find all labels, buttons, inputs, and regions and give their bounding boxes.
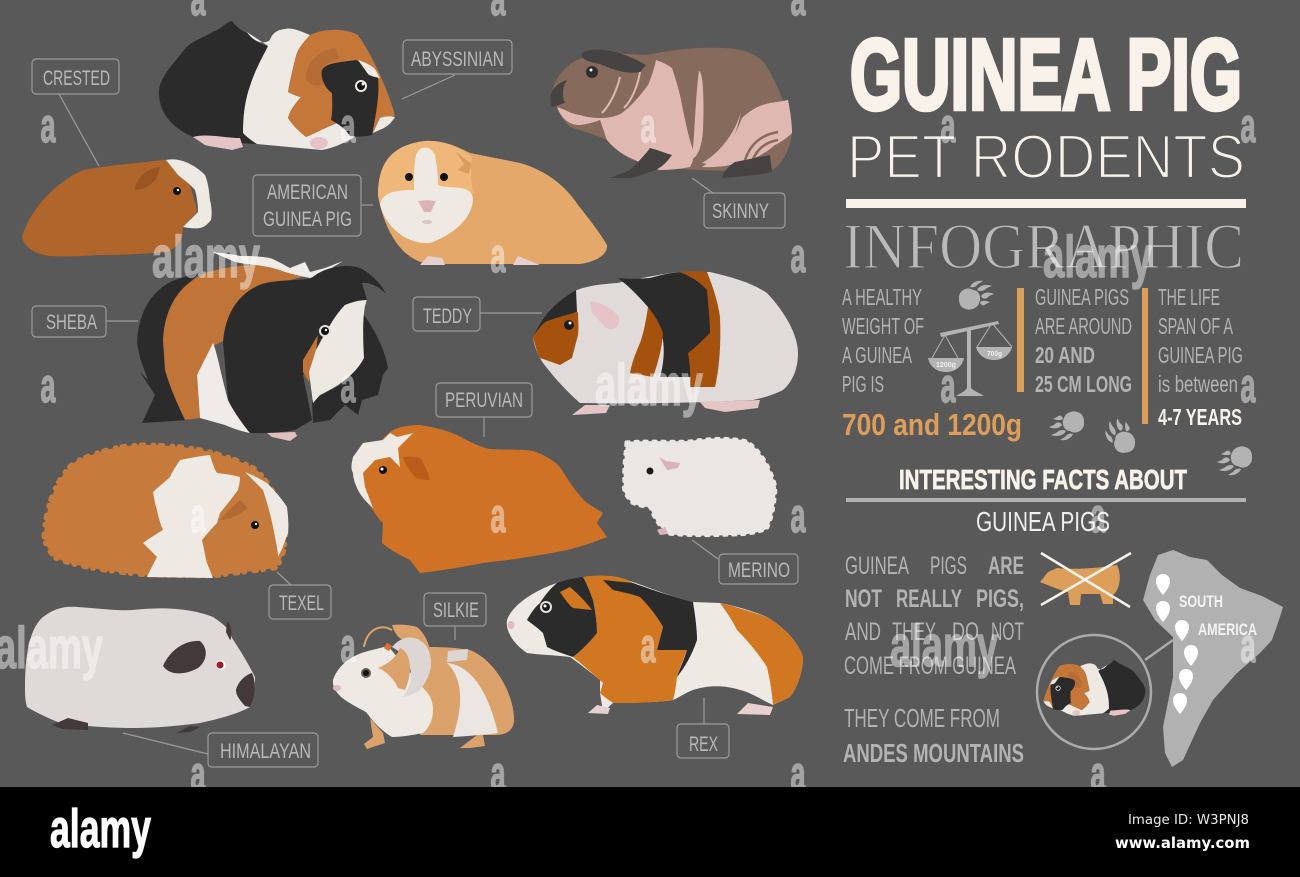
watermarks: alamy	[890, 614, 998, 679]
watermarks: a	[490, 230, 506, 283]
text: not really pigs: DO	[952, 618, 979, 646]
text: healthy weight: A HEALTHY	[842, 284, 922, 310]
watermarks: a	[940, 100, 956, 153]
text: andes mountains: THEY COME FROM	[844, 703, 1000, 733]
text: life span: SPAN OF A	[1158, 313, 1233, 339]
text: not really pigs: PIGS	[930, 552, 967, 580]
title bar	[846, 199, 1246, 208]
pig: abyssinian	[159, 21, 395, 150]
weight value: 700 and 1200g	[842, 407, 1022, 442]
pig: peruvian	[351, 425, 607, 573]
text: healthy weight: WEIGHT OF	[842, 313, 924, 339]
pig: texel	[44, 445, 288, 578]
icon: paw print	[959, 281, 994, 310]
watermarks: a	[1090, 490, 1106, 543]
map: south america	[1143, 550, 1283, 767]
text: not really pigs: COME FROM GUINEA	[844, 652, 1016, 680]
divider: orange 2	[1142, 288, 1148, 424]
watermarks: a	[1240, 620, 1256, 673]
icon: paw print 2	[1049, 411, 1084, 440]
watermarks: alamy	[1043, 225, 1152, 290]
footer bar: alamy	[50, 799, 151, 859]
label: american guinea pig: AMERICAN	[267, 181, 348, 204]
footer bar	[0, 787, 1300, 877]
text: not really pigs: THEY	[892, 618, 936, 646]
text: life span: GUINEA PIG	[1158, 342, 1243, 368]
text: healthy weight: PIG IS	[842, 371, 884, 397]
pig: crested	[22, 159, 212, 256]
label: rex	[677, 698, 729, 758]
label: abyssinian	[402, 40, 512, 99]
label: texel	[269, 572, 331, 619]
watermarks: a	[1240, 360, 1256, 413]
label: merino: MERINO	[728, 559, 790, 582]
text: andes mountains: ANDES MOUNTAINS	[843, 738, 1024, 768]
pig: rex	[507, 576, 803, 715]
icon: crossed out pig	[1040, 553, 1131, 607]
text: not really pigs	[844, 552, 1024, 680]
pig: sheba	[137, 252, 388, 441]
label: crested	[32, 59, 119, 166]
label: skinny	[692, 178, 785, 228]
text: andes mountains	[843, 703, 1024, 768]
label: sheba: SHEBA	[46, 311, 97, 334]
map: south america: SOUTH	[1179, 592, 1223, 611]
label: silkie: SILKIE	[433, 599, 479, 622]
facts heading	[846, 464, 1246, 537]
callout circle with small pig	[1037, 635, 1173, 749]
text: not really pigs: ARE	[988, 552, 1024, 580]
pig: merino	[623, 438, 776, 536]
infographic heading: INFOGRAPHIC	[843, 211, 1244, 283]
text: not really pigs: AND	[845, 618, 881, 646]
pig: skinny	[551, 48, 792, 178]
watermarks: a	[790, 230, 806, 283]
watermarks: a	[790, 490, 806, 543]
watermarks: a	[340, 100, 356, 153]
text: life span: 4-7 YEARS	[1158, 404, 1242, 430]
label: rex: REX	[689, 733, 718, 756]
pig: american guinea pig	[378, 141, 607, 265]
watermarks: a	[40, 360, 56, 413]
text: not really pigs: NOT	[845, 585, 882, 613]
watermarks: a	[1090, 748, 1106, 801]
label: teddy: TEDDY	[423, 305, 472, 328]
label: abyssinian: ABYSSINIAN	[411, 48, 504, 71]
text: not really pigs: REALLY	[896, 585, 962, 613]
label: himalayan: HIMALAYAN	[220, 740, 311, 763]
watermarks: a	[790, 748, 806, 801]
watermarks: a	[190, 748, 206, 801]
text: length: 20 AND	[1035, 342, 1095, 368]
watermarks: a	[640, 100, 656, 153]
icon: scale	[928, 321, 1012, 396]
label: teddy	[413, 297, 542, 331]
map: south america: AMERICA	[1198, 620, 1257, 639]
text: length	[1035, 284, 1132, 397]
text: life span: is between	[1158, 371, 1238, 397]
text: not really pigs: PIGS,	[976, 585, 1024, 613]
watermarks: a	[190, 490, 206, 543]
text: length: 25 CM LONG	[1035, 371, 1132, 397]
icon: paw print 4	[1217, 446, 1252, 475]
label: american guinea pig	[253, 175, 373, 236]
watermarks: a	[490, 490, 506, 543]
label: skinny: SKINNY	[712, 200, 769, 223]
watermarks: a	[340, 620, 356, 673]
text: healthy weight	[842, 284, 924, 397]
watermarks: a	[940, 360, 956, 413]
label: himalayan	[123, 733, 318, 767]
pig: himalayan	[25, 607, 255, 733]
icon: scale: 1200g	[936, 362, 956, 369]
subtitle: PET RODENTS	[847, 123, 1245, 192]
text: length: ARE AROUND	[1035, 313, 1132, 339]
pig: silkie	[333, 625, 514, 749]
text: life span	[1158, 284, 1243, 430]
label: peruvian: PERUVIAN	[445, 389, 523, 412]
watermarks: alamy	[152, 225, 260, 290]
text: healthy weight: A GUINEA	[842, 342, 912, 368]
watermarks: a	[1240, 100, 1256, 153]
facts heading: INTERESTING FACTS ABOUT	[899, 464, 1187, 495]
footer bar: Image ID: W3PNJ8	[1128, 813, 1249, 828]
label: texel: TEXEL	[279, 592, 324, 615]
watermarks: a	[340, 360, 356, 413]
label: merino	[692, 540, 798, 584]
text: not really pigs: GUINEA	[845, 552, 909, 580]
watermarks: alamy	[595, 353, 703, 418]
label: silkie	[424, 593, 486, 640]
watermarks: a	[640, 620, 656, 673]
divider: orange 1	[1017, 288, 1024, 392]
text: length: GUINEA PIGS	[1035, 284, 1129, 310]
text: not really pigs: NOT	[991, 618, 1024, 646]
label: american guinea pig: GUINEA PIG	[263, 208, 352, 231]
footer bar: www.alamy.com	[1115, 834, 1250, 852]
icon: scale: 700g	[987, 351, 1002, 358]
label: crested: CRESTED	[43, 67, 110, 90]
watermarks: a	[40, 100, 56, 153]
watermarks: a	[490, 748, 506, 801]
icon: paw print 3	[1104, 417, 1136, 454]
label: sheba	[32, 306, 138, 337]
label: peruvian	[436, 383, 532, 437]
pig: teddy	[533, 271, 798, 415]
facts heading: GUINEA PIGS	[976, 506, 1110, 537]
text: life span: THE LIFE	[1158, 284, 1220, 310]
